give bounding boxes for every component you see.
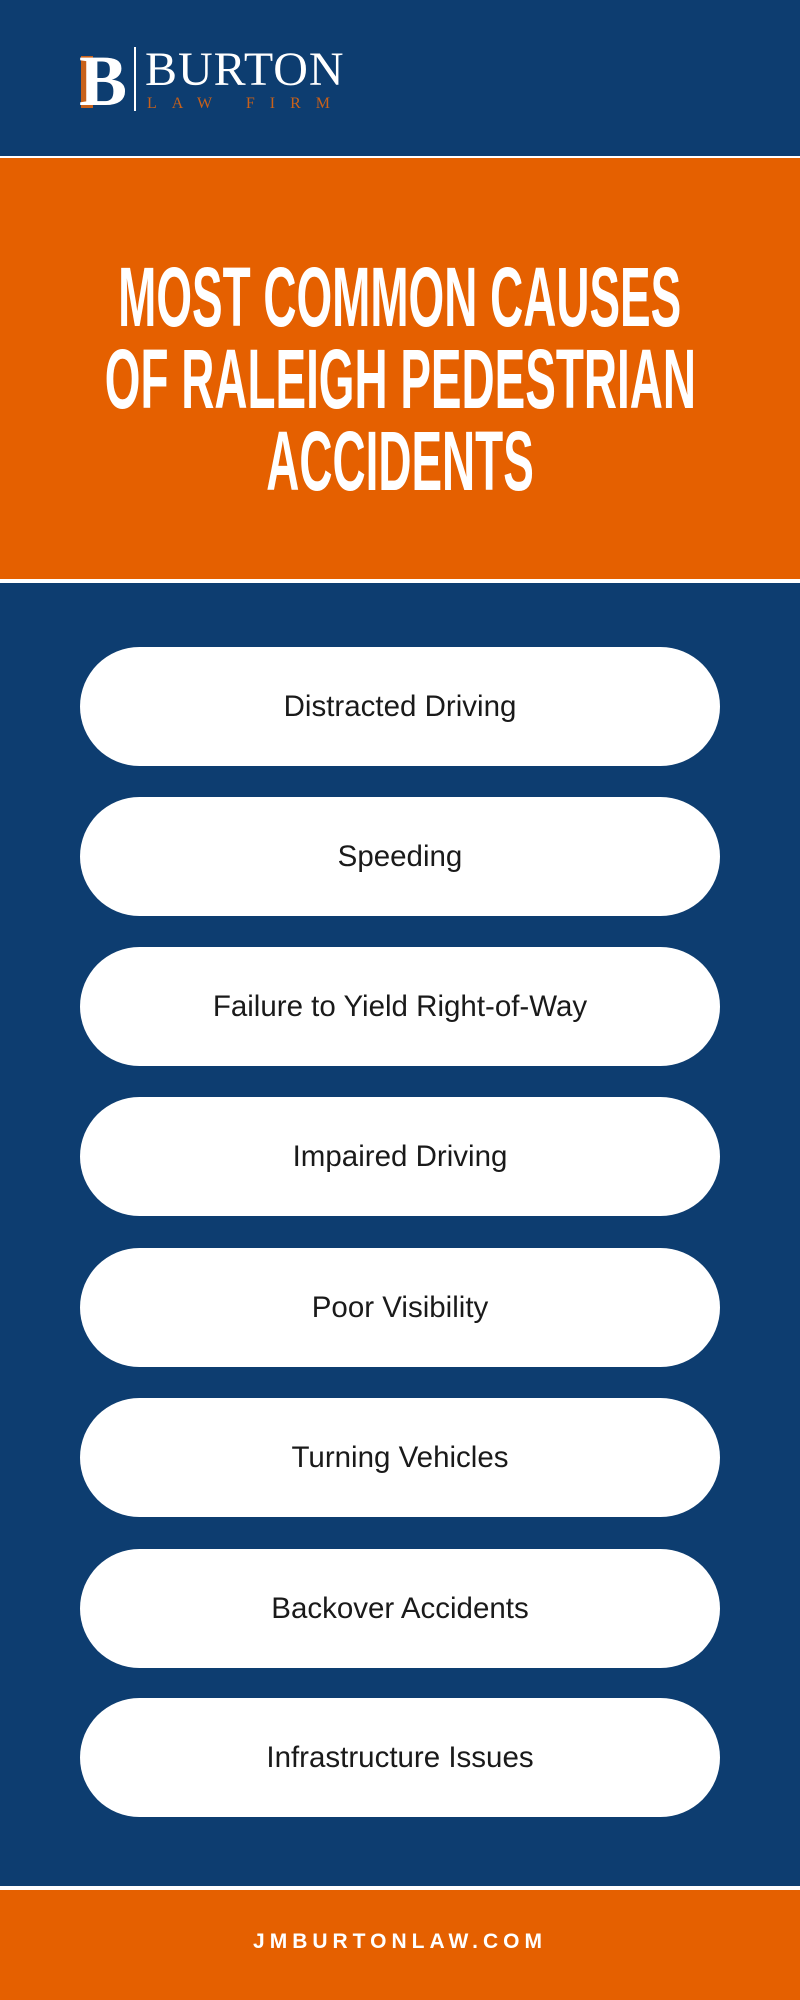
- cause 8: Infrastructure Issues: [266, 1740, 534, 1774]
- cause 7: Backover Accidents: [271, 1592, 529, 1624]
- footer: [0, 1886, 800, 2000]
- title: [104, 250, 696, 508]
- cause 3: [80, 947, 720, 1066]
- cause 6: [80, 1398, 720, 1517]
- cause 8: [80, 1698, 720, 1817]
- logo text: BURTON: [145, 43, 345, 96]
- title: MOST COMMON CAUSES: [118, 250, 682, 344]
- cause 7: [80, 1549, 720, 1668]
- title: ACCIDENTS: [266, 414, 534, 508]
- divider lines: [0, 156, 800, 158]
- cause 1: [80, 647, 720, 766]
- title: OF RALEIGH PEDESTRIAN: [104, 332, 696, 426]
- icon: column B: B: [79, 41, 127, 121]
- cause 3: Failure to Yield Right-of-Way: [213, 990, 587, 1022]
- cause 2: [80, 797, 720, 916]
- header band: [0, 0, 800, 156]
- cause 4: [80, 1097, 720, 1216]
- cause 5: [80, 1248, 720, 1367]
- title panel: [0, 158, 800, 579]
- logo: LAW FIRM: [147, 95, 345, 112]
- logo: [79, 41, 345, 121]
- cause 6: Turning Vehicles: [291, 1440, 508, 1474]
- cause 4: Impaired Driving: [293, 1140, 507, 1172]
- cause 5: Poor Visibility: [312, 1290, 488, 1324]
- footer url: JMBURTONLAW.COM: [253, 1930, 547, 1953]
- cause 2: Speeding: [338, 840, 462, 872]
- cause 1: Distracted Driving: [284, 690, 516, 722]
